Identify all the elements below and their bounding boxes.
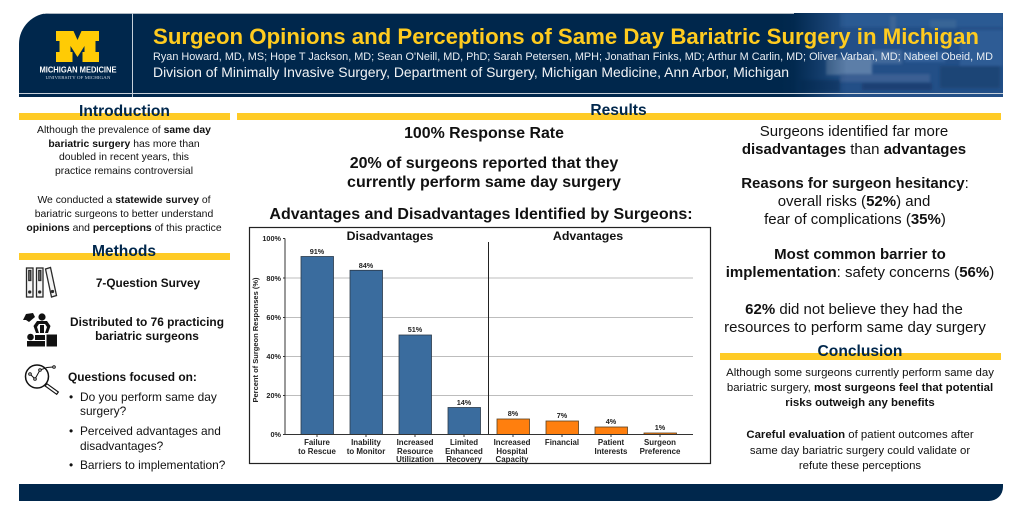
category labels: Recovery xyxy=(446,455,482,464)
campus photo xyxy=(780,13,1003,97)
panel: conclusion xyxy=(720,343,1001,472)
introduction text xyxy=(26,125,222,234)
panel: results xyxy=(237,102,1001,464)
icon: magnifier xyxy=(26,365,58,394)
affiliation: Division of Minimally Invasive Surgery, Department of Surgery, Michigan Medicine, Ann Arbor, Michigan xyxy=(153,65,789,80)
bar chart: Advantages xyxy=(553,229,623,243)
category labels xyxy=(298,438,681,464)
y axis ticks: 60% xyxy=(266,313,282,322)
footer band xyxy=(19,484,1003,501)
questions list: • xyxy=(69,458,73,472)
key findings text: overall risks (52%) and xyxy=(778,193,930,210)
conclusion text: bariatric surgery, most surgeons feel that potential xyxy=(727,382,993,394)
icon: surgeon xyxy=(23,313,57,346)
conclusion text: Although some surgeons currently perform same day xyxy=(726,367,994,379)
introduction text: bariatric surgery has more than xyxy=(48,139,200,150)
questions list: disadvantages? xyxy=(80,439,164,453)
category labels: Increased xyxy=(494,438,531,447)
conclusion text: Careful evaluation of patient outcomes after xyxy=(746,429,974,441)
category labels: Financial xyxy=(545,438,579,447)
results heading: Results xyxy=(590,102,647,119)
questions list: Questions focused on: xyxy=(68,370,197,384)
icon: binders xyxy=(26,268,56,297)
bar values: 51% xyxy=(408,325,423,334)
y axis ticks: 20% xyxy=(266,391,282,400)
wordmark: MICHIGAN MEDICINE xyxy=(40,66,117,74)
category labels: Hospital xyxy=(496,447,528,456)
gridlines xyxy=(285,278,693,396)
y axis ticks xyxy=(262,234,282,439)
category labels: to Monitor xyxy=(347,447,385,456)
methods heading: Methods xyxy=(92,243,156,260)
category labels: Enhanced xyxy=(445,447,483,456)
methods heading bar xyxy=(19,253,230,260)
axes xyxy=(283,238,693,437)
bar values: 14% xyxy=(457,398,472,407)
distribution label: bariatric surgeons xyxy=(95,329,199,343)
bar values: 8% xyxy=(508,409,519,418)
questions list: • xyxy=(69,390,73,404)
key findings text: Most common barrier to xyxy=(774,246,946,263)
category labels: Limited xyxy=(450,438,478,447)
category labels: Preference xyxy=(640,447,681,456)
category labels: to Rescue xyxy=(298,447,336,456)
y axis ticks: 0% xyxy=(270,430,282,439)
bar values: 7% xyxy=(557,411,568,420)
key findings text: Reasons for surgeon hesitancy: xyxy=(741,175,969,192)
category labels: Increased xyxy=(397,438,434,447)
category labels: Surgeon xyxy=(644,438,676,447)
bar values xyxy=(310,247,666,432)
panel: introduction xyxy=(19,103,230,234)
survey label: 7-Question Survey xyxy=(96,276,201,290)
category labels: Failure xyxy=(304,438,331,447)
bar chart xyxy=(250,228,710,464)
category labels: Patient xyxy=(598,438,625,447)
introduction heading: Introduction xyxy=(79,103,170,120)
introduction heading bar xyxy=(19,113,230,120)
key findings text: resources to perform same day surgery xyxy=(724,319,986,336)
key findings text xyxy=(724,123,994,336)
same day statement: currently perform same day surgery xyxy=(347,174,621,191)
conclusion text: risks outweigh any benefits xyxy=(785,397,935,409)
key findings text: 62% did not believe they had the xyxy=(745,301,963,318)
bar values: 91% xyxy=(310,247,325,256)
category labels: Inability xyxy=(351,438,382,447)
key findings text: Surgeons identified far more xyxy=(760,123,948,140)
university line: UNIVERSITY OF MICHIGAN xyxy=(46,76,111,80)
key findings text: disadvantages than advantages xyxy=(742,141,966,158)
category labels: Capacity xyxy=(496,455,529,464)
advantage bars xyxy=(497,419,676,434)
disadvantage bars xyxy=(301,256,480,434)
introduction text: practice remains controversial xyxy=(55,166,193,177)
chart title: Advantages and Disadvantages Identified by Surgeons: xyxy=(269,206,693,223)
introduction text: doubled in recent years, this xyxy=(59,152,189,163)
conclusion text xyxy=(726,367,994,472)
distribution label xyxy=(70,315,224,343)
questions list: Perceived advantages and xyxy=(80,424,221,438)
chart section titles: Disadvantages xyxy=(347,229,434,243)
introduction text: Although the prevalence of same day xyxy=(37,125,211,136)
authors: Ryan Howard, MD, MS; Hope T Jackson, MD; Sean O'Neill, MD, PhD; Sarah Petersen, MPH; Jonathan Finks, MD; Arthur M Carlin, MD; Oliver Varban, MD; Nabeel Obeid, MD xyxy=(153,51,993,63)
distribution label: Distributed to 76 practicing xyxy=(70,315,224,329)
category labels: Utilization xyxy=(396,455,434,464)
conclusion heading bar xyxy=(720,353,1001,360)
results heading bar xyxy=(237,113,1001,120)
questions list: surgery? xyxy=(80,404,127,418)
introduction text: bariatric surgeons to better understand xyxy=(35,209,213,220)
block M xyxy=(56,31,99,62)
section divider xyxy=(488,242,490,435)
conclusion heading: Conclusion xyxy=(818,343,902,360)
header banner xyxy=(19,13,1003,97)
bar values: 84% xyxy=(359,261,374,270)
response rate: 100% Response Rate xyxy=(404,125,564,142)
same day statement xyxy=(347,155,621,191)
introduction text: opinions and perceptions of this practice xyxy=(26,223,222,234)
panel: methods xyxy=(19,243,230,472)
category labels: Interests xyxy=(595,447,628,456)
conclusion text: same day bariatric surgery could validate or xyxy=(750,445,970,457)
y axis ticks: 100% xyxy=(262,234,282,243)
key findings text: fear of complications (35%) xyxy=(764,211,946,228)
same day statement: 20% of surgeons reported that they xyxy=(350,155,618,172)
y axis title: Percent of Surgeon Responses (%) xyxy=(251,277,260,403)
category labels: Resource xyxy=(397,447,434,456)
y axis ticks: 80% xyxy=(266,274,282,283)
bar values: 4% xyxy=(606,417,617,426)
logo: Michigan Medicine xyxy=(40,31,117,80)
questions list: Do you perform same day xyxy=(80,390,217,404)
conclusion text: refute these perceptions xyxy=(799,460,921,472)
questions list xyxy=(68,370,226,472)
key findings text: implementation: safety concerns (56%) xyxy=(726,264,994,281)
questions list: • xyxy=(69,424,73,438)
introduction text: We conducted a statewide survey of xyxy=(37,195,211,206)
poster title: Surgeon Opinions and Perceptions of Same Day Bariatric Surgery in Michigan xyxy=(153,24,979,49)
bar values: 1% xyxy=(655,423,666,432)
questions list: Barriers to implementation? xyxy=(80,458,226,472)
y axis ticks: 40% xyxy=(266,352,282,361)
